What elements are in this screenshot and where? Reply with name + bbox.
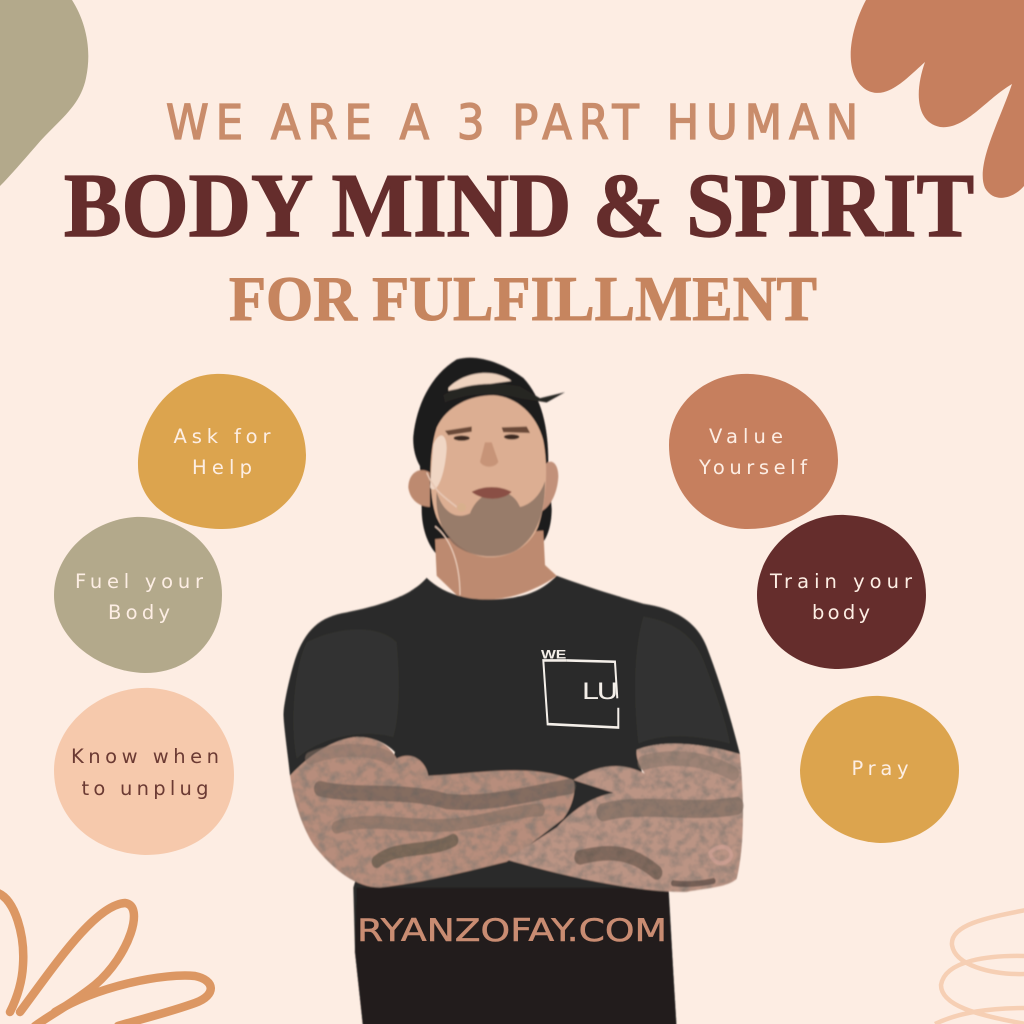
bubble: fuel your body: [54, 517, 222, 673]
bubble: value yourself: [669, 374, 838, 529]
bubble: pray: [800, 696, 959, 843]
bubble: ask for help: [138, 374, 306, 529]
bubble: know when to unplug: to unplug: [82, 777, 208, 800]
shirt: [283, 576, 740, 1024]
bubble: ask for help: Ask for: [174, 425, 271, 448]
shirt logo: we lu: LU: [582, 678, 618, 705]
bubble: train your body: Train your: [769, 570, 913, 593]
strap: [443, 384, 565, 402]
left forearm: [290, 737, 575, 888]
tattoo texture: [291, 736, 744, 892]
forehead gap: [448, 373, 512, 391]
beard: [436, 481, 545, 556]
subheading: for fulfillment: FOR FULFILLMENT: [229, 263, 817, 334]
bubble: fuel your body: Fuel your: [75, 570, 204, 593]
neck: [435, 531, 557, 600]
bubble: train your body: [757, 515, 926, 669]
bubble: know when to unplug: Know when: [71, 745, 219, 768]
bubble: pray: Pray: [852, 757, 908, 780]
tattoos: [310, 750, 737, 884]
shirt shading: [293, 630, 399, 758]
bubble: fuel your body: Body: [108, 601, 170, 624]
heading: body mind & spirit: BODY MIND & SPIRIT: [64, 155, 974, 256]
brows and eyes: [445, 427, 530, 435]
bubble: ask for help: Help: [192, 456, 252, 479]
shirt logo: we lu: WE: [541, 649, 566, 662]
bubble: value yourself: Yourself: [698, 456, 808, 479]
decorative swirl: bottom right: [935, 910, 1024, 1024]
highlight on face side: [430, 435, 447, 490]
mouth: [472, 487, 512, 499]
cap back: [413, 358, 552, 554]
bubble: train your body: body: [812, 601, 870, 624]
decorative blob: top left: [0, 0, 88, 186]
decorative flower: top right: [851, 0, 1024, 198]
shirt logo: we lu: [541, 649, 618, 728]
website url: RYANZOFAY.COM: [357, 913, 667, 949]
microphone: [457, 503, 466, 512]
photo: man with crossed arms: [280, 358, 753, 1024]
bubble: know when to unplug: [54, 688, 234, 855]
bubble: value yourself: Value: [709, 425, 783, 448]
right forearm: [507, 744, 743, 892]
decorative flower outline: bottom left: [0, 893, 211, 1024]
nose: [480, 442, 498, 467]
face: [430, 395, 546, 557]
ears: [408, 470, 430, 507]
title: we are a 3 part human: WE ARE A 3 PART HUMAN: [166, 95, 858, 151]
